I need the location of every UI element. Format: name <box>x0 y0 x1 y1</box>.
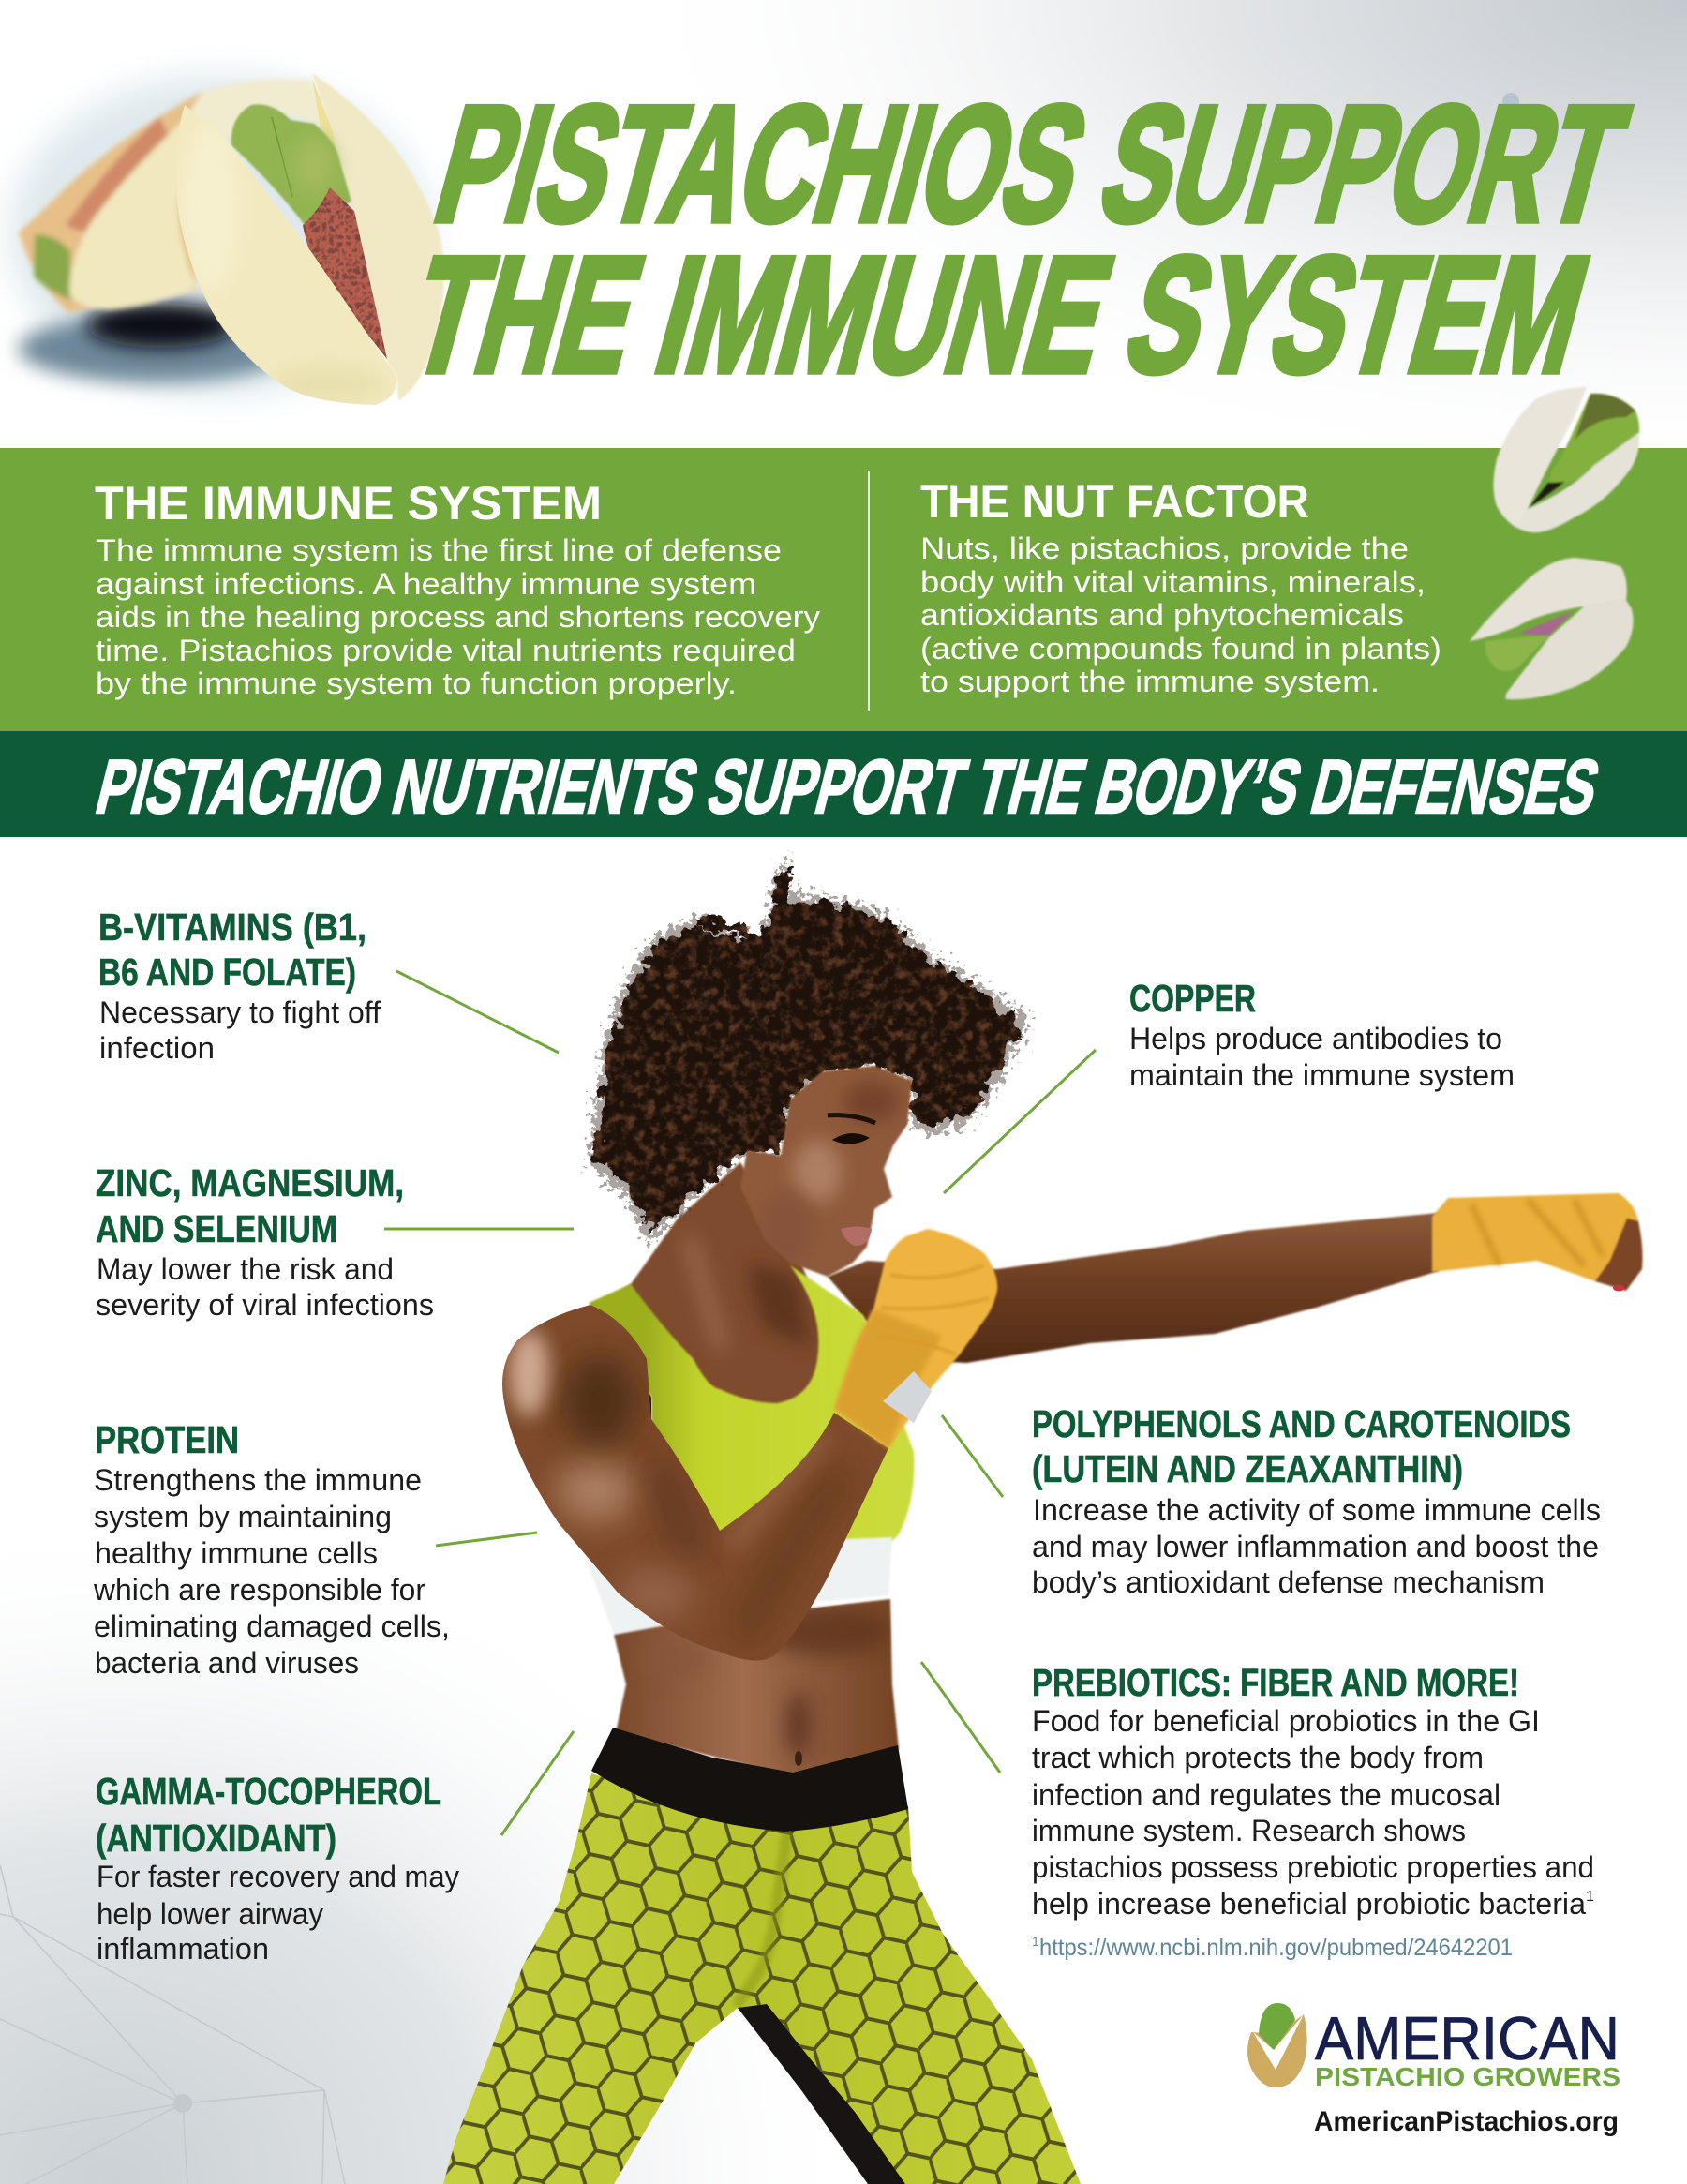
nutrient: prebiotics: 1 <box>1586 1889 1594 1905</box>
footnote: https://www.ncbi.nlm.nih.gov/pubmed/24642201 <box>1039 1935 1513 1961</box>
panel: the nut factor <box>920 475 1441 698</box>
navel <box>795 1751 802 1766</box>
wrist patch <box>883 1371 932 1423</box>
kernel <box>231 104 351 225</box>
green band <box>0 448 1687 731</box>
panel: the nut factor: THE NUT FACTOR <box>920 475 1309 528</box>
nutrient: prebiotics: PREBIOTICS: FIBER AND MORE! <box>1032 1661 1519 1704</box>
logo: american pistachio growers: AMERICAN <box>1315 2004 1620 2072</box>
pants <box>443 1773 1081 2184</box>
nutrient: polyphenols and carotenoids: (LUTEIN AND ZEAXANTHIN) <box>1032 1447 1463 1490</box>
logo: american pistachio growers: PISTACHIO GROWERS <box>1315 2062 1620 2091</box>
nutrient: protein: healthy immune cells <box>95 1536 378 1570</box>
panel: the immune system <box>95 477 820 700</box>
eye and brow <box>828 1115 875 1123</box>
nutrient: polyphenols and carotenoids: and may lower inflammation and boost the <box>1032 1530 1599 1563</box>
lime top <box>589 1265 914 1548</box>
nutrient: prebiotics: tract which protects the body from <box>1032 1741 1484 1774</box>
neck and chest <box>589 1162 829 1415</box>
folded arm <box>502 1305 888 1660</box>
nutrient: b-vitamins <box>98 905 381 1065</box>
nutrient: gamma-tocopherol: (ANTIOXIDANT) <box>96 1817 336 1860</box>
nutrient: copper: maintain the immune system <box>1129 1058 1515 1092</box>
nutrient: prebiotics: immune system. Research shows <box>1032 1814 1466 1847</box>
footnote: 1 <box>1032 1934 1039 1949</box>
hair fuzz <box>588 856 1031 1244</box>
nutrient: zinc, magnesium, selenium: ZINC, MAGNESIUM, <box>96 1161 404 1204</box>
panel: the immune system: against infections. A healthy immune system <box>96 567 756 601</box>
nutrient: zinc, magnesium, selenium <box>96 1161 434 1322</box>
logo: american pistachio growers <box>1247 2003 1620 2137</box>
hand wrap front <box>834 1229 997 1448</box>
face <box>740 1066 912 1277</box>
panel: the nut factor: antioxidants and phytochemicals <box>920 598 1404 632</box>
nutrient: gamma-tocopherol <box>96 1770 459 1966</box>
nutrient: protein: eliminating damaged cells, <box>94 1609 450 1643</box>
nutrient: polyphenols and carotenoids: body’s antioxidant defense mechanism <box>1032 1565 1545 1599</box>
nutrient: b-vitamins: Necessary to fight off <box>99 995 381 1029</box>
panel: the immune system: The immune system is the first line of defense <box>96 533 782 567</box>
hair <box>597 867 1022 1233</box>
nutrient: polyphenols and carotenoids: Increase the activity of some immune cells <box>1033 1493 1601 1527</box>
panel: the nut factor: Nuts, like pistachios, provide the <box>920 531 1409 565</box>
photo: pistachio hero <box>9 73 444 405</box>
nutrient: protein: bacteria and viruses <box>95 1646 359 1680</box>
logo: american pistachio growers: AmericanPistachios.org <box>1314 2106 1619 2137</box>
nutrient: protein: system by maintaining <box>94 1500 392 1533</box>
nutrient: b-vitamins: infection <box>99 1031 215 1065</box>
waist band <box>591 1728 908 1832</box>
nutrient: prebiotics: help increase beneficial probiotic bacteria <box>1032 1887 1586 1921</box>
nutrient: prebiotics: infection and regulates the mucosal <box>1032 1778 1500 1812</box>
nutrient: gamma-tocopherol: help lower airway <box>97 1897 323 1931</box>
nutrient: gamma-tocopherol: GAMMA-TOCOPHEROL <box>96 1770 441 1813</box>
title <box>394 72 1642 406</box>
fist <box>1595 1219 1642 1291</box>
network decoration <box>0 1865 345 2184</box>
nutrient: gamma-tocopherol: For faster recovery and may <box>97 1860 459 1893</box>
nutrient: protein: PROTEIN <box>95 1418 239 1461</box>
nutrient: protein: Strengthens the immune <box>94 1463 422 1497</box>
extended arm <box>828 1213 1439 1363</box>
nutrient: prebiotics <box>1032 1661 1594 1921</box>
nutrient: b-vitamins: B6 AND FOLATE) <box>98 950 356 994</box>
panel: the nut factor: (active compounds found in plants) <box>920 632 1441 666</box>
nutrient: protein <box>93 1418 450 1680</box>
panel: the immune system: aids in the healing process and shortens recovery <box>96 600 820 634</box>
main shell half <box>176 105 396 405</box>
hand wrap extended <box>1432 1193 1638 1281</box>
panel: the nut factor: to support the immune system. <box>920 665 1380 698</box>
panel: the immune system: by the immune system to function properly. <box>96 666 737 700</box>
icon: pistachio lower <box>1470 558 1634 699</box>
right shell half <box>312 73 444 401</box>
nutrient: b-vitamins: B-VITAMINS (B1, <box>98 905 366 949</box>
nutrient: prebiotics: Food for beneficial probiotics in the GI <box>1032 1704 1540 1738</box>
leader lines <box>384 971 1096 1835</box>
icon: pistachio upper <box>1494 387 1639 532</box>
panel: the immune system: THE IMMUNE SYSTEM <box>95 477 602 530</box>
red skin <box>303 187 387 359</box>
nutrient: zinc, magnesium, selenium: severity of viral infections <box>96 1288 434 1322</box>
torso <box>614 1599 899 1776</box>
panel: the immune system: time. Pistachios provide vital nutrients required <box>96 634 796 667</box>
nutrient: copper: Helps produce antibodies to <box>1129 1022 1502 1055</box>
nutrient: gamma-tocopherol: inflammation <box>97 1932 269 1966</box>
nutrient: zinc, magnesium, selenium: AND SELENIUM <box>96 1207 337 1250</box>
white band <box>572 1523 892 1635</box>
lips <box>841 1226 872 1246</box>
nutrient: protein: which are responsible for <box>93 1573 425 1607</box>
photo: boxer woman <box>443 856 1642 2184</box>
nutrient: prebiotics: pistachios possess prebiotic properties and <box>1032 1850 1594 1884</box>
nutrient: zinc, magnesium, selenium: May lower the risk and <box>97 1252 394 1286</box>
nutrient: polyphenols and carotenoids: POLYPHENOLS AND CAROTENOIDS <box>1032 1402 1571 1445</box>
nutrient: polyphenols and carotenoids <box>1032 1402 1601 1599</box>
nutrient: copper: COPPER <box>1129 977 1256 1020</box>
nutrient: copper <box>1129 977 1515 1092</box>
panel: the nut factor: body with vital vitamins, minerals, <box>920 565 1426 599</box>
